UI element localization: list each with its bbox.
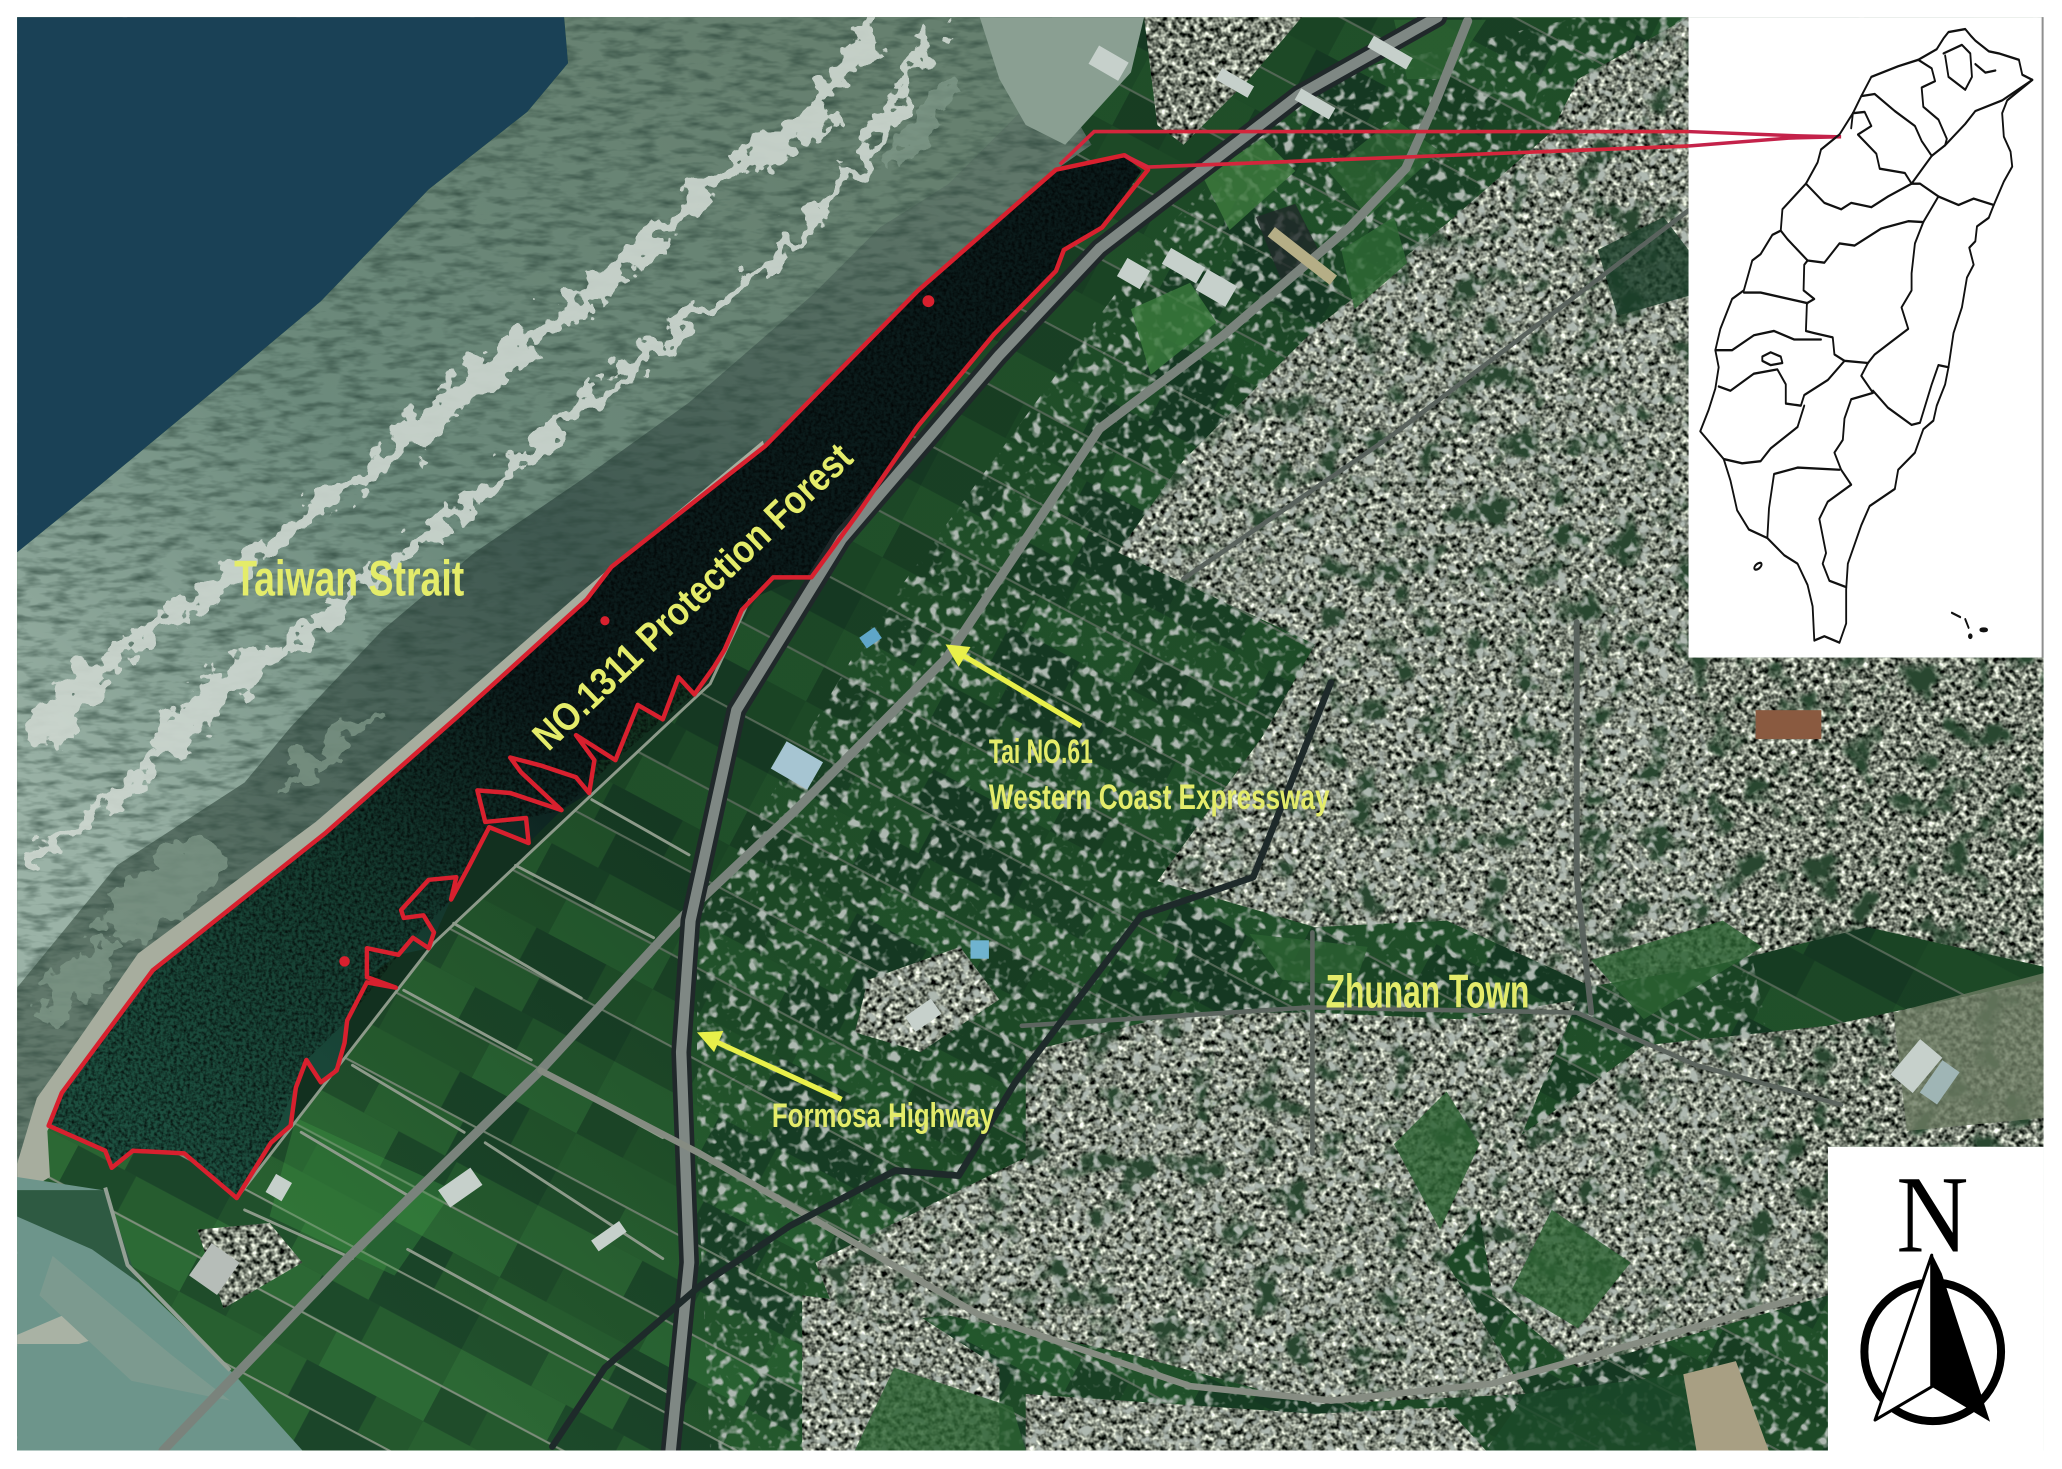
label: Formosa Highway: Formosa Highway bbox=[772, 1097, 994, 1135]
label: Taiwan Strait: Taiwan Strait bbox=[234, 551, 464, 607]
inset panel: Taiwan locator map bbox=[1689, 17, 2044, 658]
dark woodland beside the forest boundary bbox=[258, 558, 842, 1168]
compass ring and needle bbox=[1864, 1253, 2001, 1422]
estuary water bbox=[17, 1177, 302, 1451]
sandy plot bbox=[1683, 1361, 1769, 1451]
tidal flat light patches bbox=[27, 73, 958, 1032]
buildings bbox=[189, 36, 1960, 1295]
sparse buildings over farmland bbox=[697, 17, 1828, 1451]
thin field roads bbox=[237, 600, 750, 1394]
tidal flat texture bbox=[17, 122, 1092, 1158]
green fields in town area bbox=[855, 20, 2044, 1451]
bright rice paddies bbox=[270, 1118, 454, 1276]
label: NO.1311 Protection Forest: NO.1311 Protection Forest bbox=[524, 435, 861, 759]
label: Western Coast Expressway: Western Coast Expressway bbox=[989, 777, 1330, 817]
compass letter N: N bbox=[1896, 1154, 1968, 1276]
forest stand bbox=[49, 155, 1141, 1198]
vegetation patches within the town bbox=[815, 17, 2044, 1405]
roads bbox=[163, 17, 1841, 1451]
wave texture bbox=[17, 17, 1039, 999]
red protection forest boundary bbox=[49, 155, 1148, 1198]
arrow to Formosa Highway bbox=[697, 1031, 842, 1099]
inset panel: north arrow bbox=[1828, 1147, 2044, 1451]
red callout lines to the inset bbox=[1060, 132, 1689, 167]
Western Coast Expressway bbox=[163, 21, 1468, 1451]
Formosa Highway bbox=[671, 17, 1437, 1451]
arrow to Western Coast Expressway bbox=[946, 644, 1081, 726]
tidal flats bbox=[17, 114, 1092, 1164]
beach sand bbox=[17, 441, 765, 1197]
label: Tai NO.61: Tai NO.61 bbox=[989, 733, 1093, 771]
town ring road bbox=[540, 1070, 1799, 1401]
Taiwan county outlines bbox=[1700, 29, 2032, 643]
port water bbox=[980, 17, 1144, 145]
label: Zhunan Town: Zhunan Town bbox=[1326, 965, 1529, 1018]
canal bbox=[552, 683, 1331, 1447]
surf bands bbox=[30, 34, 934, 860]
shallow water bbox=[17, 17, 1039, 999]
deep-water sea bbox=[17, 17, 568, 552]
estuary vegetation and sand bars bbox=[17, 1188, 230, 1401]
callout lines in inset bbox=[1689, 132, 1841, 146]
forest texture bbox=[49, 155, 1141, 1198]
